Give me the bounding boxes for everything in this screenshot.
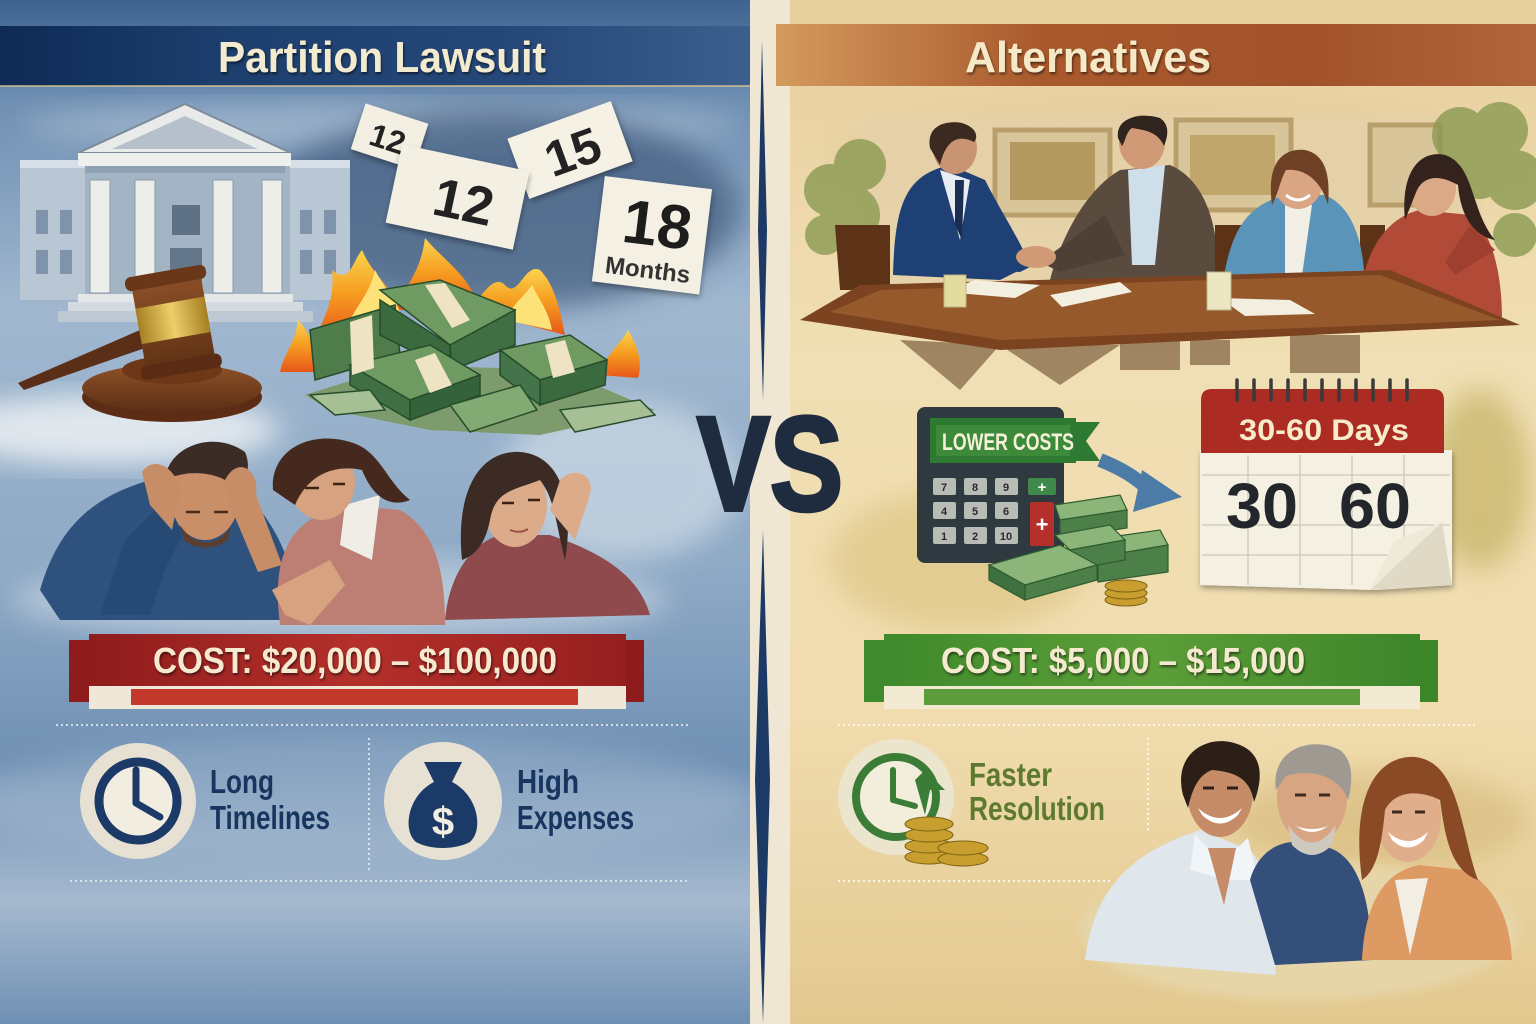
illustration: courthouse xyxy=(20,104,350,322)
illustration: gavel xyxy=(18,264,262,422)
icon: calendar 30-60 days: 60 xyxy=(1339,470,1411,542)
divider: center strip with navy spike xyxy=(750,0,790,1024)
text: Faster Resolution xyxy=(969,756,1105,827)
text: High Expenses: High xyxy=(517,763,579,800)
illustration: calculator and money: + xyxy=(1038,479,1047,496)
icon: money bag xyxy=(384,742,502,860)
icon: clock with coins xyxy=(838,739,988,866)
illustration: calculator and money: 6 xyxy=(1003,506,1009,518)
text: Long Timelines: Timelines xyxy=(210,799,330,836)
text: Long Timelines xyxy=(210,763,330,836)
heading bar: Alternatives xyxy=(776,24,1536,86)
illustration: calculator and money: 9 xyxy=(1003,482,1009,494)
text: High Expenses: Expenses xyxy=(517,799,634,836)
illustration: calculator and money xyxy=(917,407,1168,606)
illustration: calculator and money: 10 xyxy=(1000,531,1012,543)
illustration: calculator and money: 2 xyxy=(972,531,978,543)
arrow: costs to calendar xyxy=(1100,460,1182,512)
illustration: calculator and money: + xyxy=(1036,512,1048,537)
illustration: calendar pages: 15 xyxy=(537,116,609,188)
illustration: calendar pages: 12 xyxy=(428,167,499,238)
illustration: mediation meeting xyxy=(800,102,1536,390)
illustration: happy family xyxy=(1080,741,1520,1000)
panel: right background xyxy=(788,0,1536,1024)
cost banner: alternatives xyxy=(864,634,1438,709)
icon: calendar 30-60 days: 30 xyxy=(1226,470,1298,542)
illustration: calculator and money: 5 xyxy=(972,506,978,518)
text: Long Timelines: Long xyxy=(210,763,274,800)
heading bar: Partition Lawsuit xyxy=(0,26,750,87)
illustration: burning money xyxy=(280,238,655,435)
heading bar: Alternatives: Alternatives xyxy=(965,33,1211,82)
icon: clock xyxy=(80,743,196,859)
text: High Expenses xyxy=(517,763,634,836)
cost banner: alternatives: COST: $5,000 – $15,000 xyxy=(941,640,1305,681)
illustration: calendar pages: 12 xyxy=(365,116,410,162)
cost banner: lawsuit xyxy=(69,634,644,709)
illustration: calendar pages: 18 xyxy=(619,187,696,264)
ribbon: lower costs xyxy=(930,418,1100,463)
text: Faster Resolution: Resolution xyxy=(969,790,1105,827)
VS: VS xyxy=(697,390,843,539)
illustration: calculator and money: 7 xyxy=(941,482,947,494)
heading bar: Partition Lawsuit: Partition Lawsuit xyxy=(218,33,546,82)
illustration: calendar pages xyxy=(351,101,712,294)
panel: left background xyxy=(0,0,760,1024)
illustration: calculator and money: 1 xyxy=(941,531,947,543)
illustration: calculator and money: 8 xyxy=(972,482,978,494)
icon: calendar 30-60 days: 30-60 Days xyxy=(1239,414,1409,447)
icon: money bag: $ xyxy=(432,800,454,844)
icon: calendar 30-60 days xyxy=(1200,380,1452,590)
divider lines: right xyxy=(838,725,1476,881)
illustration: calculator and money: 4 xyxy=(941,506,948,518)
cost banner: lawsuit: COST: $20,000 – $100,000 xyxy=(153,640,557,681)
illustration: stressed people xyxy=(40,439,650,625)
text: Faster Resolution: Faster xyxy=(969,756,1052,793)
ribbon: lower costs: LOWER COSTS xyxy=(942,429,1074,456)
illustration: calendar pages: Months xyxy=(604,252,692,289)
divider lines: left xyxy=(56,725,690,881)
